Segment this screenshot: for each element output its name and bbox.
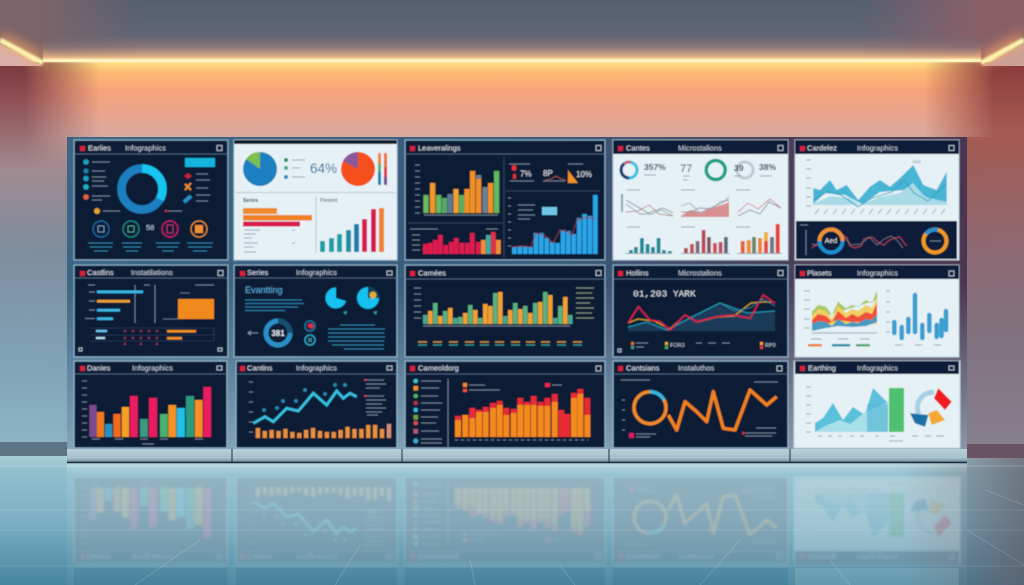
heading: Evantting xyxy=(245,285,283,295)
headline figure: 01,203 YARK xyxy=(633,288,696,300)
stacked bar chart xyxy=(455,389,590,440)
panel: row 3 column 5 area and segments xyxy=(794,361,960,448)
panel: row 3 column 3 stacked bars: Cameoldorg xyxy=(418,364,459,372)
layered area chart xyxy=(806,159,947,214)
green bar xyxy=(889,388,904,432)
progress ring: 381 xyxy=(271,329,285,338)
grouped bar chart xyxy=(414,288,572,326)
chart captions xyxy=(886,291,941,345)
mid legend xyxy=(94,208,182,214)
legend xyxy=(618,342,776,352)
right wall column xyxy=(928,62,1024,137)
stacked area chart xyxy=(804,290,877,333)
ceiling light strip xyxy=(0,40,1024,63)
panel: row 2 column 5 stacked area and range bars xyxy=(795,265,959,357)
kpi figures: 39 xyxy=(734,163,744,173)
donut chart xyxy=(122,168,163,210)
kpi rings xyxy=(621,160,753,180)
small rings xyxy=(305,321,315,345)
small bars trio xyxy=(625,224,782,254)
chart legends xyxy=(463,383,562,392)
panel: row 1 column 4 kpi rings and small charts xyxy=(613,140,788,260)
frame reflection xyxy=(67,462,967,585)
horizontal bars xyxy=(243,208,312,252)
stacked vertical bars xyxy=(378,153,387,185)
panel: row 2 column 5 stacked area and range bars: Infographics xyxy=(857,268,898,278)
horizontal bar chart xyxy=(85,285,214,323)
floor tile lines xyxy=(0,466,1024,585)
panel: row 3 column 1 colored bars xyxy=(74,361,227,448)
panel: row 2 column 4 line chart xyxy=(613,265,788,357)
vertical bars xyxy=(320,208,384,252)
line chart trio xyxy=(622,190,781,217)
segmented ring xyxy=(910,388,952,436)
icon row xyxy=(93,221,207,237)
right icon list xyxy=(184,173,210,202)
panel: row 2 column 5 stacked area and range bars: Plasets xyxy=(807,268,832,278)
panel: row 2 column 4 line chart: Microstalions xyxy=(678,268,722,278)
panel: row 3 column 4 ring and zigzag: Instaluthos xyxy=(678,364,715,372)
floor reflection of bottom row xyxy=(74,477,960,564)
ceiling corner tints xyxy=(40,0,982,58)
legend: RP9 xyxy=(765,343,776,349)
kpi figures: 357% xyxy=(644,162,666,172)
panel: row 1 column 5 area chart: Cardelez xyxy=(807,144,837,152)
legend xyxy=(808,339,870,346)
horizontal bars heading: Series xyxy=(243,198,258,204)
zigzag line xyxy=(668,390,777,430)
panel: row 3 column 3 stacked bars xyxy=(405,361,605,448)
kpi row: 7% xyxy=(520,170,532,178)
panel: row 2 column 1 horizontal bars xyxy=(74,265,228,357)
blue area bar chart xyxy=(508,195,598,254)
panel: row 1 column 2 pies and bars xyxy=(234,140,397,260)
panel: row 3 column 4 ring and zigzag: Cantsians xyxy=(626,364,660,372)
side legend xyxy=(576,288,594,318)
panel: row 2 column 3 grouped bars xyxy=(405,265,605,357)
floor reflection of middle row tops xyxy=(74,568,959,585)
vertical bars heading: Present xyxy=(320,198,338,204)
icon row figure: 58 xyxy=(146,223,154,232)
panel: row 3 column 2 line over bars: Infographics xyxy=(296,364,337,372)
bars xyxy=(256,424,391,438)
multi line chart xyxy=(628,295,775,331)
panel: row 2 column 2 text and pies: Infographics xyxy=(296,268,337,277)
kpi figures: 77 xyxy=(680,163,692,175)
bottom legend second row xyxy=(418,344,582,346)
bottom table xyxy=(79,328,222,351)
floor right shade xyxy=(900,456,1024,585)
right pie xyxy=(341,152,375,186)
side notes xyxy=(249,379,386,432)
layered area chart: 1922 xyxy=(912,159,922,164)
panel: row 3 column 2 line over bars: Cantins xyxy=(247,364,273,372)
panel: row 2 column 2 text and pies xyxy=(234,265,397,357)
bottom legend xyxy=(418,341,582,343)
left pie xyxy=(243,152,277,186)
legend and labels xyxy=(621,380,778,438)
panel: row 2 column 1 horizontal bars: Instatilations xyxy=(131,268,173,277)
pie legend xyxy=(284,158,305,179)
dark sub panel with rings: Aed xyxy=(825,238,837,245)
baseboard right xyxy=(967,444,1024,458)
panel: row 1 column 3 bars and areas: Leaveralings xyxy=(418,144,461,152)
grouped bar chart xyxy=(415,165,499,215)
percentage: 64% xyxy=(310,161,337,176)
panel: row 2 column 4 line chart: Hollins xyxy=(626,268,649,278)
body text xyxy=(328,325,385,349)
red bar chart xyxy=(410,229,501,254)
right ceiling corner xyxy=(981,0,1024,62)
kpi figures: 38% xyxy=(759,162,776,172)
progress ring xyxy=(248,321,290,345)
right ledge under light xyxy=(982,44,1024,66)
panel: row 3 column 2 line over bars xyxy=(236,361,397,448)
ring chart xyxy=(634,392,666,424)
right half wall base xyxy=(512,137,1024,447)
kpi row xyxy=(509,164,592,183)
bar chart xyxy=(82,381,211,444)
orange block xyxy=(163,293,214,319)
kpi row: 8P xyxy=(543,169,553,178)
panel: row 3 column 5 area and segments: Infographics xyxy=(857,364,898,372)
cyan button xyxy=(185,158,215,167)
kpi row: 10% xyxy=(576,170,592,179)
pie pair xyxy=(325,287,379,315)
panel: row 1 column 1 donut overview: Earlies xyxy=(88,144,111,152)
range bar chart xyxy=(894,295,946,338)
panel: row 2 column 2 text and pies: Series xyxy=(247,268,269,277)
panel: row 1 column 4 kpi rings and small charts: Microstalions xyxy=(678,144,722,152)
legend: FOR3 xyxy=(670,343,685,349)
panel: row 1 column 5 area chart xyxy=(795,140,959,260)
panel: row 3 column 1 colored bars: Infographics xyxy=(132,364,173,372)
line chart xyxy=(253,383,357,423)
corner light glow xyxy=(0,38,1024,60)
panel: row 1 column 3 bars and areas xyxy=(405,140,605,260)
panel: row 2 column 1 horizontal bars: Castlins xyxy=(87,268,114,277)
baseboard left xyxy=(0,442,67,456)
floor xyxy=(0,456,1024,585)
panel: row 1 column 4 kpi rings and small charts: Cantes xyxy=(626,144,650,152)
panel: row 1 column 1 donut overview: Infographics xyxy=(125,144,166,152)
icon captions xyxy=(88,243,213,251)
panel: row 1 column 5 area chart: Infographics xyxy=(857,144,898,152)
panel: row 3 column 5 area and segments: Earthing xyxy=(808,364,836,372)
left wall column xyxy=(0,62,96,166)
left ceiling corner xyxy=(0,0,43,62)
display wall frame xyxy=(67,137,967,462)
panel: row 3 column 4 ring and zigzag xyxy=(613,361,788,448)
panel: row 3 column 1 colored bars: Danies xyxy=(87,364,111,372)
area chart xyxy=(806,387,903,441)
dark sub panel with rings xyxy=(796,221,957,259)
panel: row 2 column 3 grouped bars: Camées xyxy=(418,268,446,278)
left ledge under light xyxy=(0,44,42,66)
paragraph xyxy=(245,300,304,310)
kpi figures xyxy=(644,162,776,175)
left icon list xyxy=(83,159,110,200)
side list xyxy=(413,379,448,447)
panel: row 1 column 1 donut overview xyxy=(74,140,228,260)
